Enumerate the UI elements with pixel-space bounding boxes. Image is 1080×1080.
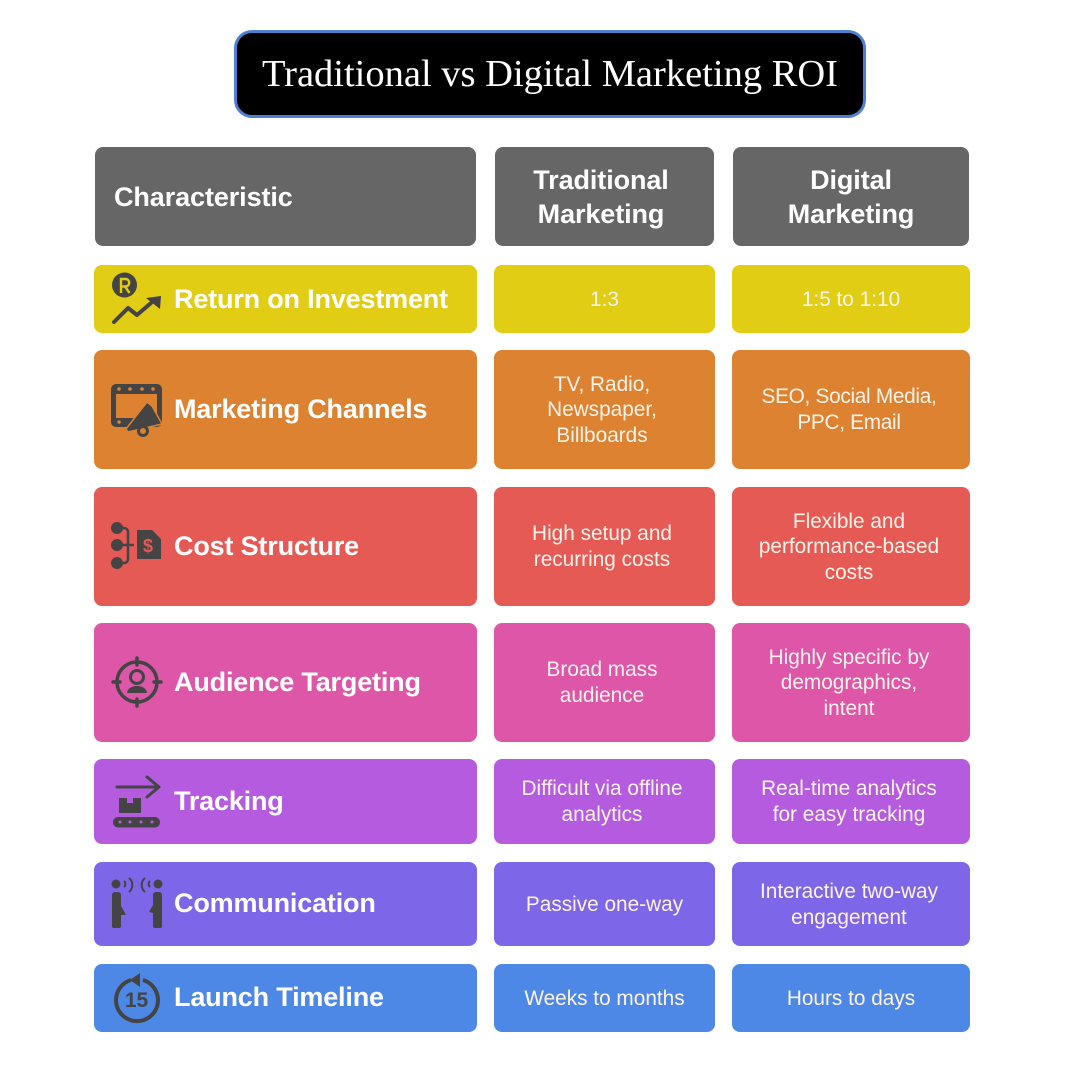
value: digital audience: Highly specific by (769, 646, 929, 669)
value: traditional tracking (494, 759, 715, 844)
title (234, 30, 866, 118)
icon: 15 timer: 15 (125, 989, 148, 1012)
header: characteristic (95, 147, 476, 246)
value: digital tracking: for easy tracking (773, 803, 925, 826)
value: digital channels: SEO, Social Media, (762, 385, 936, 408)
value: digital timeline: Hours to days (787, 987, 915, 1010)
value: digital channels (732, 350, 970, 469)
value: traditional communication: Passive one-way (526, 893, 683, 916)
value: traditional ROI (494, 265, 715, 333)
value: digital cost: costs (825, 561, 873, 584)
value: digital cost: performance-based (759, 535, 939, 558)
row panel: return on investment (94, 265, 477, 333)
value: traditional channels: TV, Radio, (554, 373, 650, 396)
value: digital audience: demographics, (781, 671, 917, 694)
value: traditional ROI: 1:3 (590, 288, 619, 311)
value: digital tracking: Real-time analytics (761, 777, 937, 800)
value: digital audience: intent (824, 697, 874, 720)
value: digital channels: PPC, Email (797, 411, 901, 434)
label: return on investment: Return on Investment (174, 284, 448, 314)
value: traditional channels: Billboards (556, 424, 648, 447)
value: digital communication: Interactive two-way (760, 880, 938, 903)
icon: audience target (113, 658, 161, 706)
value: digital cost (732, 487, 970, 606)
icon: cost flow and price document: $ (143, 536, 153, 556)
value: digital ROI: 1:5 to 1:10 (802, 288, 900, 311)
value: traditional communication (494, 862, 715, 946)
header: traditional marketing (495, 147, 714, 246)
header: characteristic: Characteristic (114, 182, 293, 212)
row panel: audience targeting (94, 623, 477, 742)
value: digital ROI (732, 265, 970, 333)
value: traditional cost: recurring costs (534, 548, 670, 571)
header: digital marketing: Marketing (788, 198, 914, 228)
value: digital communication (732, 862, 970, 946)
label: audience targeting: Audience Targeting (174, 667, 421, 697)
value: traditional cost (494, 487, 715, 606)
value: digital cost: Flexible and (793, 510, 905, 533)
icon: film screen with megaphone (111, 384, 162, 436)
value: traditional channels: Newspaper, (547, 398, 657, 421)
value: traditional audience: Broad mass (547, 658, 657, 681)
value: traditional audience (494, 623, 715, 742)
value: traditional audience: audience (560, 684, 644, 707)
row panel: communication (94, 862, 477, 946)
label: tracking: Tracking (174, 786, 284, 816)
row panel: tracking (94, 759, 477, 844)
row panel: launch timeline (94, 964, 477, 1032)
value: traditional channels (494, 350, 715, 469)
icon: cost flow and price document (111, 522, 161, 569)
label: communication: Communication (174, 888, 376, 918)
header: traditional marketing: Traditional (533, 164, 669, 194)
value: digital tracking (732, 759, 970, 844)
header: digital marketing (733, 147, 969, 246)
value: digital timeline (732, 964, 970, 1032)
value: traditional cost: High setup and (532, 522, 672, 545)
icon: 15 timer (116, 973, 158, 1021)
label: cost structure: Cost Structure (174, 531, 359, 561)
icon: coin and rising arrow (112, 272, 161, 322)
value: traditional timeline: Weeks to months (524, 987, 685, 1010)
title: Traditional vs Digital Marketing ROI (262, 53, 838, 95)
value: digital communication: engagement (791, 906, 907, 928)
header: digital marketing: Digital (810, 164, 892, 194)
row panel: cost structure (94, 487, 477, 606)
label: launch timeline: Launch Timeline (174, 982, 384, 1012)
value: digital audience (732, 623, 970, 742)
row panel: marketing channels (94, 350, 477, 469)
value: traditional timeline (494, 964, 715, 1032)
value: traditional tracking: Difficult via offline (521, 777, 683, 800)
label: marketing channels: Marketing Channels (174, 394, 427, 424)
icon: two people talking (112, 878, 162, 928)
icon: conveyor with arrow (113, 777, 160, 828)
header: traditional marketing: Marketing (538, 198, 664, 228)
value: traditional tracking: analytics (562, 803, 642, 826)
